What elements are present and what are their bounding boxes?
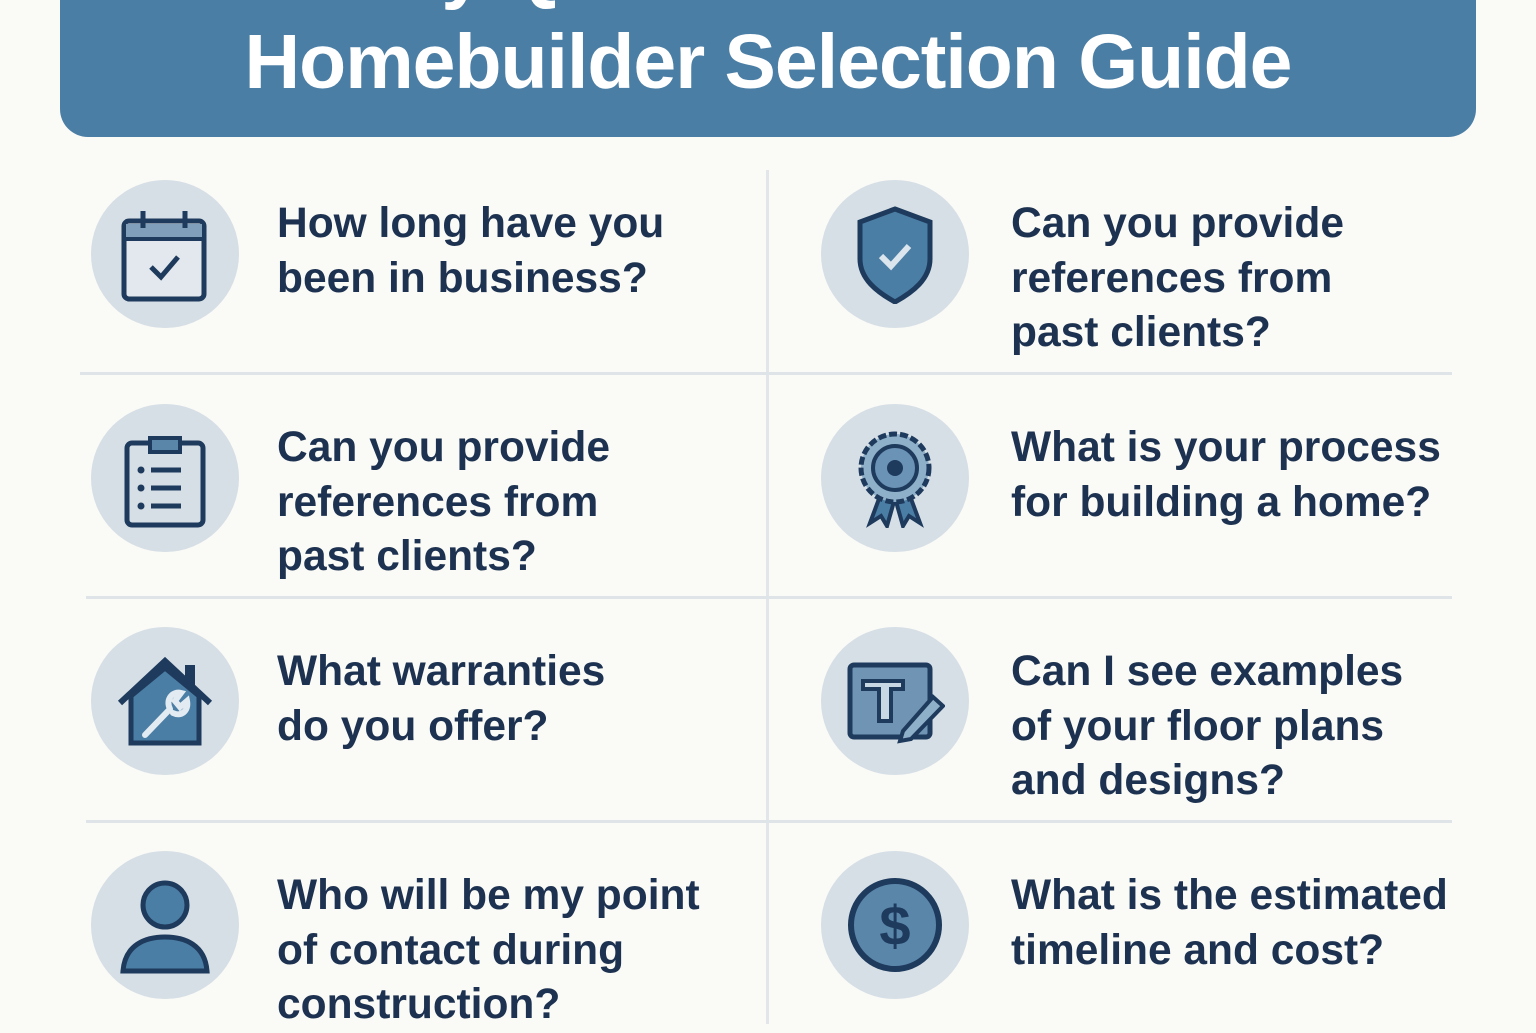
question 2: Can you provide (1011, 200, 1344, 247)
question 1: How long have you (277, 200, 664, 247)
question 7: Who will be my point (277, 872, 700, 919)
question 3: past clients? (277, 533, 537, 580)
question 8: timeline and cost? (1011, 926, 1384, 974)
icon: floor plan with pencil (821, 627, 969, 775)
title: Homebuilder Selection Guide (245, 19, 1291, 105)
question 1: been in business? (277, 254, 648, 302)
question 8 (1011, 872, 1448, 974)
question 8: What is the estimated (1011, 872, 1448, 919)
question 2 (1011, 200, 1344, 356)
question 5: What warranties (277, 648, 605, 695)
question 3: Can you provide (277, 424, 610, 471)
header banner (60, 0, 1476, 137)
question 3 (277, 424, 610, 580)
icon: house with wrench (91, 627, 239, 775)
question 7: of contact during (277, 926, 624, 974)
question 6 (1011, 648, 1403, 804)
question 5: do you offer? (277, 702, 548, 750)
question 4: What is your process (1011, 424, 1441, 471)
icon: dollar coin (821, 851, 969, 999)
question 4 (1011, 424, 1441, 526)
icon: dollar coin: $ (879, 894, 911, 957)
question 2: past clients? (1011, 309, 1271, 356)
icon: award ribbon (821, 404, 969, 552)
question 3: references from (277, 478, 598, 526)
question 6: of your floor plans (1011, 702, 1384, 750)
icon: person (91, 851, 239, 999)
question 4: for building a home? (1011, 478, 1431, 526)
icon: calendar (91, 180, 239, 328)
question 7 (277, 872, 700, 1028)
question 1 (277, 200, 664, 302)
question 7: construction? (277, 981, 560, 1028)
question 6: Can I see examples (1011, 648, 1403, 695)
question 5 (277, 648, 605, 750)
icon: shield (821, 180, 969, 328)
icon: clipboard (91, 404, 239, 552)
question 6: and designs? (1011, 757, 1285, 804)
question 2: references from (1011, 254, 1332, 302)
